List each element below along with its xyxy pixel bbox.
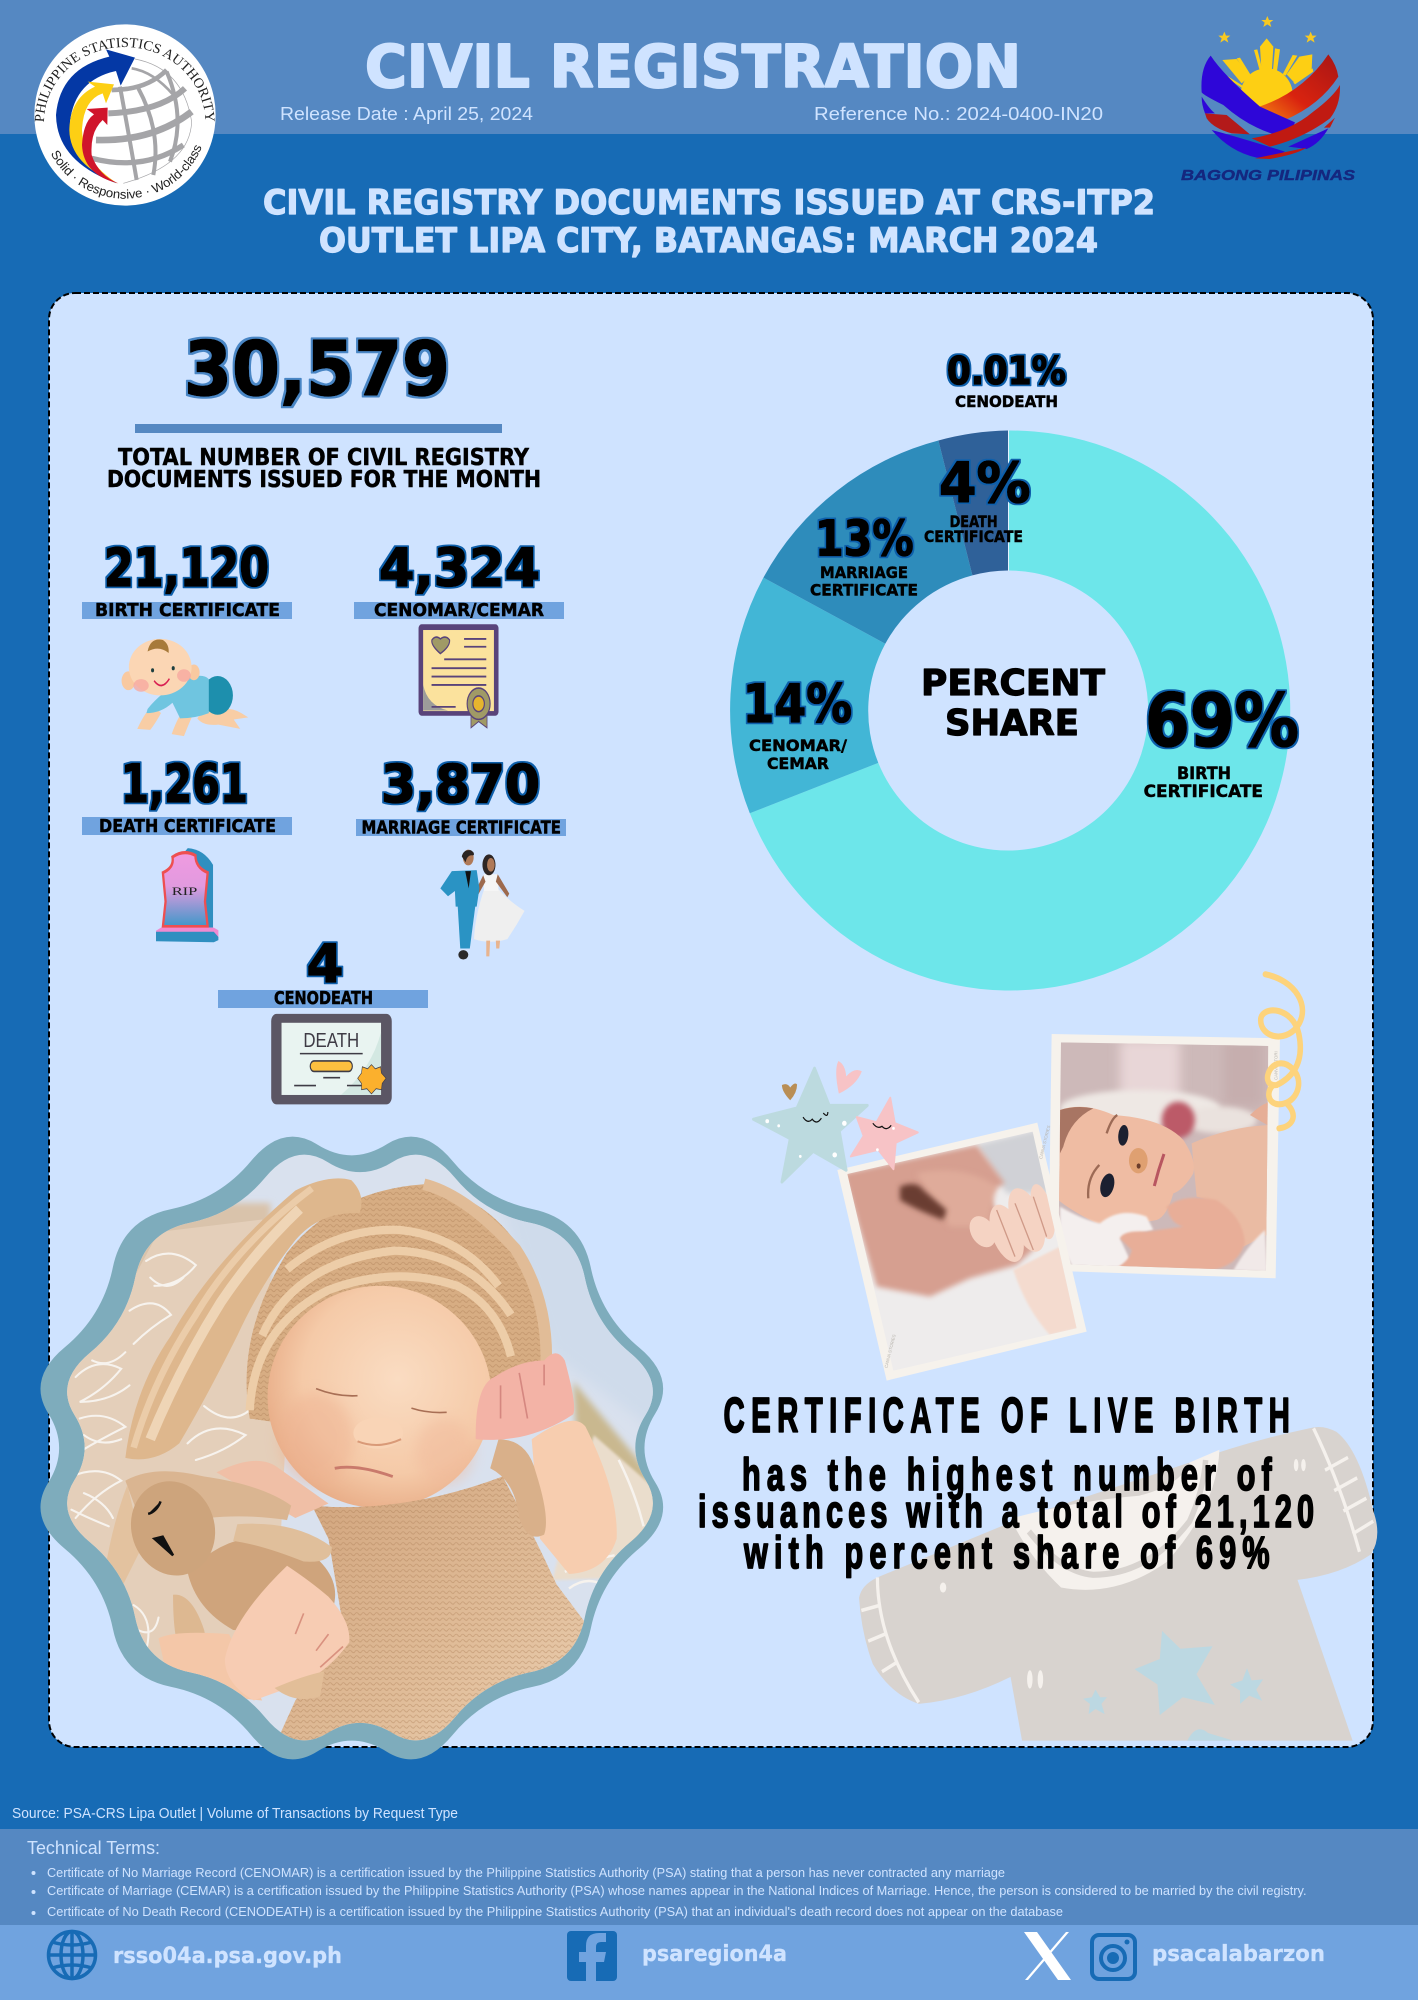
logo: Bagong Pilipinas bbox=[1201, 16, 1340, 159]
photo: newborn looking at camera: CANVA STORI bbox=[1274, 1051, 1279, 1080]
photo: baby hand holding finger bbox=[837, 1123, 1090, 1381]
instagram and x handle: psacalabarzon bbox=[1152, 1942, 1325, 1967]
illustration: grey baby onesie bbox=[859, 1427, 1377, 1741]
subtitle: OUTLET LIPA CITY, BATANGAS: MARCH 2024 bbox=[319, 221, 1098, 260]
donut label: 4% death certificate: 4% bbox=[939, 451, 1030, 515]
technical terms panel: Technical Terms: bbox=[27, 1838, 160, 1858]
stat: cenodeath: CENODEATH bbox=[274, 989, 373, 1009]
photo: newborn looking at camera bbox=[1048, 1034, 1280, 1278]
stat: birth certificate: BIRTH CERTIFICATE bbox=[95, 601, 280, 621]
strap bbox=[490, 1439, 546, 1537]
hand by face bbox=[476, 1353, 574, 1440]
callout: certificate of live birth: CERTIFICATE OF LIVE BIRTH bbox=[724, 1387, 1290, 1443]
facebook handle: psaregion4a bbox=[642, 1942, 787, 1967]
icon: RIP tombstone bbox=[156, 848, 218, 942]
icon: globe bbox=[48, 1931, 96, 1979]
donut label: 4% death certificate: DEATH bbox=[950, 512, 998, 531]
decoration: yellow spiral bbox=[1261, 974, 1302, 1128]
release date: Release Date : April 25, 2024 bbox=[280, 103, 533, 124]
icon: instagram bbox=[1092, 1935, 1135, 1979]
donut label: 69% birth certificate bbox=[1144, 679, 1299, 802]
icon: death certificate: DEATH bbox=[303, 1029, 359, 1051]
technical terms panel: Certificate of No Marriage Record (CENOMAR) is a certification issued by the Philippine Statistics Authority (PSA) stating that a person has never contracted any marriage bbox=[47, 1866, 1005, 1880]
icon: X bbox=[1024, 1932, 1071, 1980]
donut label: 13% marriage certificate: MARRIAGE bbox=[820, 563, 908, 582]
photo: sleeping newborn in scalloped frame bbox=[40, 1137, 668, 1759]
total documents block: 30,579 bbox=[184, 325, 450, 413]
total documents block: DOCUMENTS ISSUED FOR THE MONTH bbox=[107, 467, 541, 493]
segment: cenodeath 0.01% bbox=[1008, 430, 1010, 570]
icon: death certificate bbox=[271, 1014, 392, 1104]
donut label: 4% death certificate bbox=[924, 451, 1030, 546]
logo wordmark: BAGONG PILIPINAS bbox=[1181, 167, 1355, 184]
title: CIVIL REGISTRATION bbox=[365, 32, 1021, 101]
stat: marriage certificate: MARRIAGE CERTIFICATE bbox=[362, 818, 561, 838]
stat: death certificate: 1,261 bbox=[121, 754, 248, 815]
technical terms panel bbox=[0, 1829, 1418, 1925]
donut label: 14% cenomar/cemar: CEMAR bbox=[767, 754, 829, 773]
callout: certificate of live birth: with percent share of 69% bbox=[743, 1528, 1270, 1579]
footer band bbox=[0, 1925, 1418, 2000]
total documents block bbox=[107, 325, 541, 493]
icon: certificate with ribbon bbox=[419, 624, 499, 728]
stat: marriage certificate bbox=[356, 754, 566, 838]
lower arm and hand bbox=[159, 1633, 262, 1700]
stat: marriage certificate: 3,870 bbox=[381, 754, 540, 816]
source note: Source: PSA-CRS Lipa Outlet | Volume of Transactions by Request Type bbox=[12, 1806, 458, 1822]
photo: baby hand holding finger: CANVA STORIES bbox=[883, 1334, 897, 1369]
icon: crawling baby bbox=[122, 639, 248, 736]
technical terms panel: Certificate of No Death Record (CENODEATH) is a certification issued by the Philippine Statistics Authority (PSA) that an individual's death record does not appear on the database bbox=[47, 1905, 1063, 1919]
segment: death certificate 4% bbox=[938, 430, 1008, 575]
technical terms panel: Certificate of Marriage (CEMAR) is a certification issued by the Philippine Statistics Authority (PSA) whose names appear in the National Indices of Marriage. Hence, the person is considered to be married by the civil registry. bbox=[47, 1884, 1306, 1898]
logo: Philippine Statistics Authority: PHILIPPINE STATISTICS AUTHORITY bbox=[34, 38, 215, 122]
subtitle: CIVIL REGISTRY DOCUMENTS ISSUED AT CRS-ITP2 bbox=[263, 183, 1155, 222]
donut label: 14% cenomar/cemar: 14% bbox=[743, 674, 852, 735]
donut label: 4% death certificate: CERTIFICATE bbox=[924, 527, 1023, 546]
right arm bbox=[532, 1421, 617, 1574]
donut label: 69% birth certificate: BIRTH bbox=[1177, 764, 1231, 784]
blanket bbox=[67, 1220, 285, 1678]
segment: marriage certificate 13% bbox=[763, 440, 972, 644]
segment: cenomar/cemar 14% bbox=[730, 578, 885, 813]
donut label: 0.01% cenodeath: CENODEATH bbox=[955, 392, 1058, 411]
hat bbox=[247, 1184, 546, 1423]
callout: certificate of live birth bbox=[698, 1387, 1314, 1579]
donut label: 13% marriage certificate: CERTIFICATE bbox=[810, 580, 918, 600]
donut chart: percent share bbox=[730, 430, 1290, 990]
icon: RIP tombstone: RIP bbox=[172, 886, 198, 899]
donut label: 13% marriage certificate: 13% bbox=[815, 510, 914, 568]
knitted bunny toy bbox=[107, 1471, 336, 1634]
donut label: 14% cenomar/cemar: CENOMAR/ bbox=[749, 736, 847, 755]
icon: bride and groom bbox=[440, 850, 525, 960]
donut center label bbox=[921, 663, 1105, 744]
donut label: 0.01% cenodeath bbox=[947, 349, 1066, 411]
donut center label: SHARE bbox=[945, 703, 1079, 744]
header band bbox=[0, 0, 1418, 134]
decoration: sleeping stars and hearts bbox=[753, 1061, 918, 1182]
stat: cenodeath: 4 bbox=[306, 934, 344, 995]
reference number: Reference No.: 2024-0400-IN20 bbox=[814, 103, 1103, 124]
donut label: 69% birth certificate: CERTIFICATE bbox=[1144, 782, 1263, 802]
stat: cenomar/cemar: 4,324 bbox=[379, 538, 540, 599]
total documents block: TOTAL NUMBER OF CIVIL REGISTRY bbox=[118, 445, 529, 471]
website: rsso04a.psa.gov.ph bbox=[113, 1944, 342, 1969]
stat: birth certificate: 21,120 bbox=[104, 538, 269, 599]
bodysuit bbox=[275, 1477, 594, 1746]
logo: Philippine Statistics Authority: Solid · Responsive · World-class bbox=[52, 145, 202, 199]
face bbox=[268, 1286, 491, 1508]
donut label: 13% marriage certificate bbox=[810, 510, 918, 600]
callout: certificate of live birth: issuances with a total of 21,120 bbox=[698, 1487, 1314, 1538]
donut label: 0.01% cenodeath: 0.01% bbox=[947, 349, 1066, 393]
stat: cenomar/cemar: CENOMAR/CEMAR bbox=[374, 601, 544, 621]
main panel bbox=[49, 293, 1373, 1747]
donut label: 69% birth certificate: 69% bbox=[1145, 679, 1299, 764]
donut center label: PERCENT bbox=[921, 663, 1105, 704]
left bunny ear on hat bbox=[125, 1178, 361, 1459]
icon: facebook bbox=[567, 1931, 617, 1981]
stat: death certificate bbox=[82, 754, 292, 837]
stat: death certificate: DEATH CERTIFICATE bbox=[99, 817, 276, 837]
stat: cenomar/cemar bbox=[354, 538, 564, 621]
subtitle bbox=[263, 183, 1155, 260]
donut label: 14% cenomar/cemar bbox=[743, 674, 852, 773]
segment: birth certificate 69% bbox=[750, 430, 1290, 990]
photo: baby hand holding finger: CANVA STORIES bbox=[1038, 1125, 1051, 1160]
stat: cenodeath bbox=[218, 934, 428, 1009]
stat: birth certificate bbox=[82, 538, 292, 621]
callout: certificate of live birth: has the highest number of bbox=[742, 1450, 1272, 1501]
logo: Philippine Statistics Authority bbox=[34, 24, 216, 206]
